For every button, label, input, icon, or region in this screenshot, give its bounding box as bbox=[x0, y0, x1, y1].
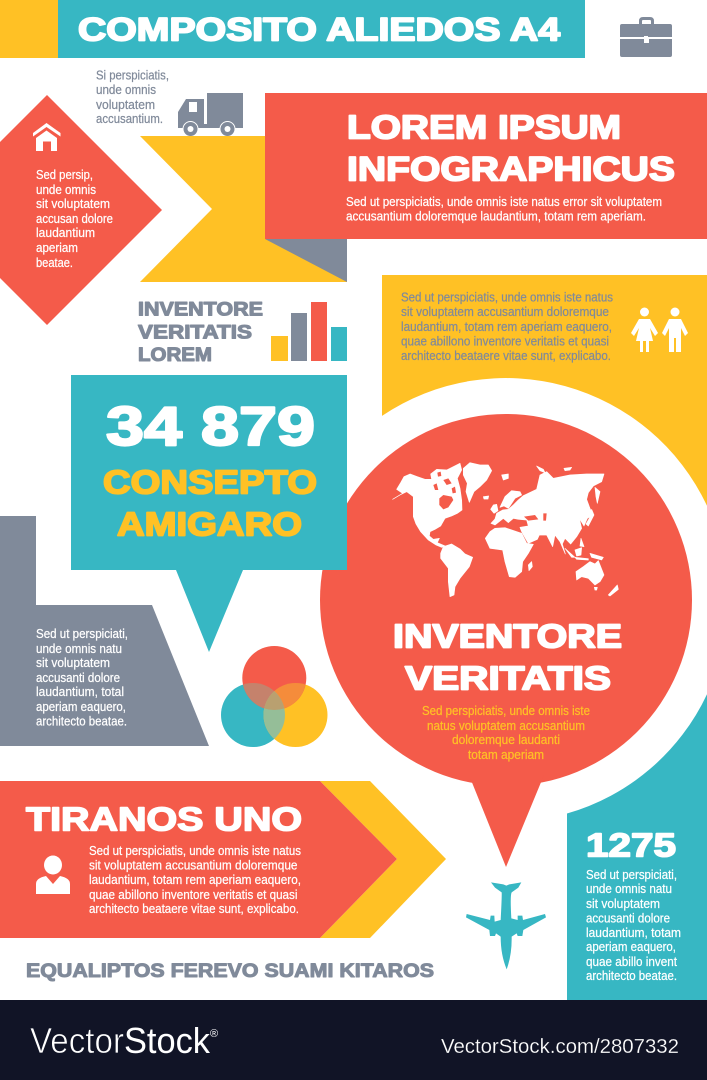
heading: VERITATIS bbox=[405, 660, 611, 696]
panel: red speech circle bbox=[320, 414, 692, 867]
text: circle body: totam aperiam bbox=[468, 748, 544, 762]
text: arrow body: sit voluptatem accusantium doloremque bbox=[89, 858, 298, 872]
header band bbox=[0, 0, 585, 58]
panel: lorem ipsum heading bbox=[265, 93, 707, 239]
text: grey panel body: unde omnis natu bbox=[36, 642, 122, 656]
text: grey panel body: laudantium, total bbox=[36, 685, 124, 699]
panel: teal corner block bbox=[567, 694, 707, 1000]
text: corner body: quae abillo invent bbox=[586, 955, 677, 969]
text: truck caption: voluptatem bbox=[96, 98, 155, 112]
heading bbox=[393, 618, 622, 696]
icon: briefcase bbox=[620, 17, 672, 57]
icon: couple bbox=[631, 308, 688, 352]
stock url: VectorStock.com/2807332 bbox=[441, 1035, 679, 1058]
footer caption: EQUALIPTOS FEREVO SUAMI KITAROS bbox=[26, 961, 434, 982]
label: inventore veritatis lorem bbox=[138, 300, 263, 366]
heading bbox=[347, 108, 675, 188]
text: corner body: aperiam eaquero, bbox=[586, 940, 676, 954]
subheading: AMIGARO bbox=[117, 506, 302, 542]
logo bbox=[30, 1020, 218, 1061]
text: yellow panel body: Sed ut perspiciatis, unde omnis iste natus bbox=[401, 290, 613, 304]
text: diamond body: Sed persip, bbox=[36, 168, 93, 182]
text: heading body: Sed ut perspiciatis, unde omnis iste natus error sit voluptatem bbox=[346, 195, 662, 209]
text: heading body bbox=[346, 195, 662, 224]
text: diamond body: laudantium bbox=[36, 226, 95, 240]
label: inventore veritatis lorem: INVENTORE bbox=[138, 300, 263, 320]
logo: ® bbox=[210, 1028, 218, 1040]
text: truck caption: Si perspiciatis, bbox=[96, 68, 169, 82]
panel: yellow text block bbox=[382, 275, 707, 506]
text: corner body: Sed ut perspiciati, bbox=[586, 868, 677, 882]
text: grey panel body bbox=[36, 627, 128, 728]
text: diamond body: beatae. bbox=[36, 256, 73, 270]
text: corner body: architecto beatae. bbox=[586, 969, 677, 983]
bar chart bbox=[271, 302, 347, 361]
text: truck caption: unde omnis bbox=[96, 83, 156, 97]
text: grey panel body: architecto beatae. bbox=[36, 714, 127, 728]
text: corner body: sit voluptatem bbox=[586, 897, 660, 911]
text: arrow body bbox=[89, 844, 301, 916]
subheading bbox=[103, 464, 317, 542]
yellow chevron bbox=[140, 136, 347, 282]
text: diamond body: sit voluptatem bbox=[36, 197, 110, 211]
text: circle body: Sed perspiciatis, unde omnis iste bbox=[422, 704, 590, 718]
heading: TIRANOS UNO bbox=[26, 800, 302, 838]
label: inventore veritatis lorem: VERITATIS bbox=[138, 322, 252, 344]
text: grey panel body: aperiam eaquero, bbox=[36, 700, 126, 714]
heading: LOREM IPSUM bbox=[347, 108, 621, 146]
text: diamond body: accusan dolore bbox=[36, 212, 113, 226]
text: arrow body: architecto beataere vitae sunt, explicabo. bbox=[89, 902, 299, 916]
watermark bar bbox=[0, 1000, 707, 1080]
text: corner body: unde omnis natu bbox=[586, 882, 672, 896]
heading: INFOGRAPHICUS bbox=[347, 150, 675, 188]
icon: truck bbox=[178, 93, 243, 136]
number: 1275 bbox=[586, 826, 676, 864]
icon: person bbox=[36, 856, 70, 894]
text: corner body: accusanti dolore bbox=[586, 912, 670, 926]
text: yellow panel body: laudantium, totam rem aperiam eaquero, bbox=[401, 320, 612, 334]
text: circle body: natus voluptatem accusantium bbox=[427, 719, 585, 733]
text: yellow panel body: architecto beataere vitae sunt, explicabo. bbox=[401, 349, 611, 363]
panel: red diamond bbox=[0, 95, 162, 325]
label: inventore veritatis lorem: LOREM bbox=[138, 345, 212, 366]
big number: 34 879 bbox=[106, 395, 315, 457]
text: heading body: accusantium doloremque laudantium, totam rem aperiam. bbox=[346, 210, 646, 224]
logo: Vector bbox=[30, 1020, 124, 1061]
text: diamond body: aperiam bbox=[36, 241, 78, 255]
text: circle body: doloremque laudanti bbox=[452, 733, 560, 747]
subheading: CONSEPTO bbox=[103, 464, 317, 500]
logo: Stock bbox=[124, 1020, 211, 1061]
panel: teal speech bubble bbox=[71, 375, 347, 652]
panel: grey block bbox=[0, 516, 209, 746]
text: yellow panel body: quae abillono inventore veritatis et quasi bbox=[401, 334, 609, 348]
text: truck caption bbox=[96, 68, 169, 126]
heading: INVENTORE bbox=[393, 618, 622, 654]
text: corner body bbox=[586, 868, 681, 983]
text: grey panel body: accusanti dolore bbox=[36, 671, 120, 685]
text: arrow body: Sed ut perspiciatis, unde omnis iste natus bbox=[89, 844, 301, 858]
panel: tiranos uno arrow bbox=[0, 781, 446, 938]
icon: house bbox=[33, 123, 60, 151]
text: yellow panel body: sit voluptatem accusantium doloremque bbox=[401, 305, 609, 319]
text: yellow panel body bbox=[401, 290, 613, 363]
text: arrow body: quae abillono inventore veritatis et quasi bbox=[89, 888, 298, 902]
venn diagram bbox=[221, 646, 328, 747]
icon: airplane bbox=[466, 882, 546, 969]
text: corner body: laudantium, totam bbox=[586, 926, 681, 940]
text: arrow body: laudantium, totam rem aperiam eaquero, bbox=[89, 873, 301, 887]
text: grey panel body: Sed ut perspiciati, bbox=[36, 627, 128, 641]
text: diamond body bbox=[36, 168, 113, 270]
text: truck caption: accusantium. bbox=[96, 112, 163, 126]
world map bbox=[393, 463, 618, 597]
text: circle body bbox=[422, 704, 590, 762]
title: COMPOSITO ALIEDOS A4 bbox=[78, 12, 560, 48]
text: diamond body: unde omnis bbox=[36, 183, 96, 197]
text: grey panel body: sit voluptatem bbox=[36, 656, 110, 670]
